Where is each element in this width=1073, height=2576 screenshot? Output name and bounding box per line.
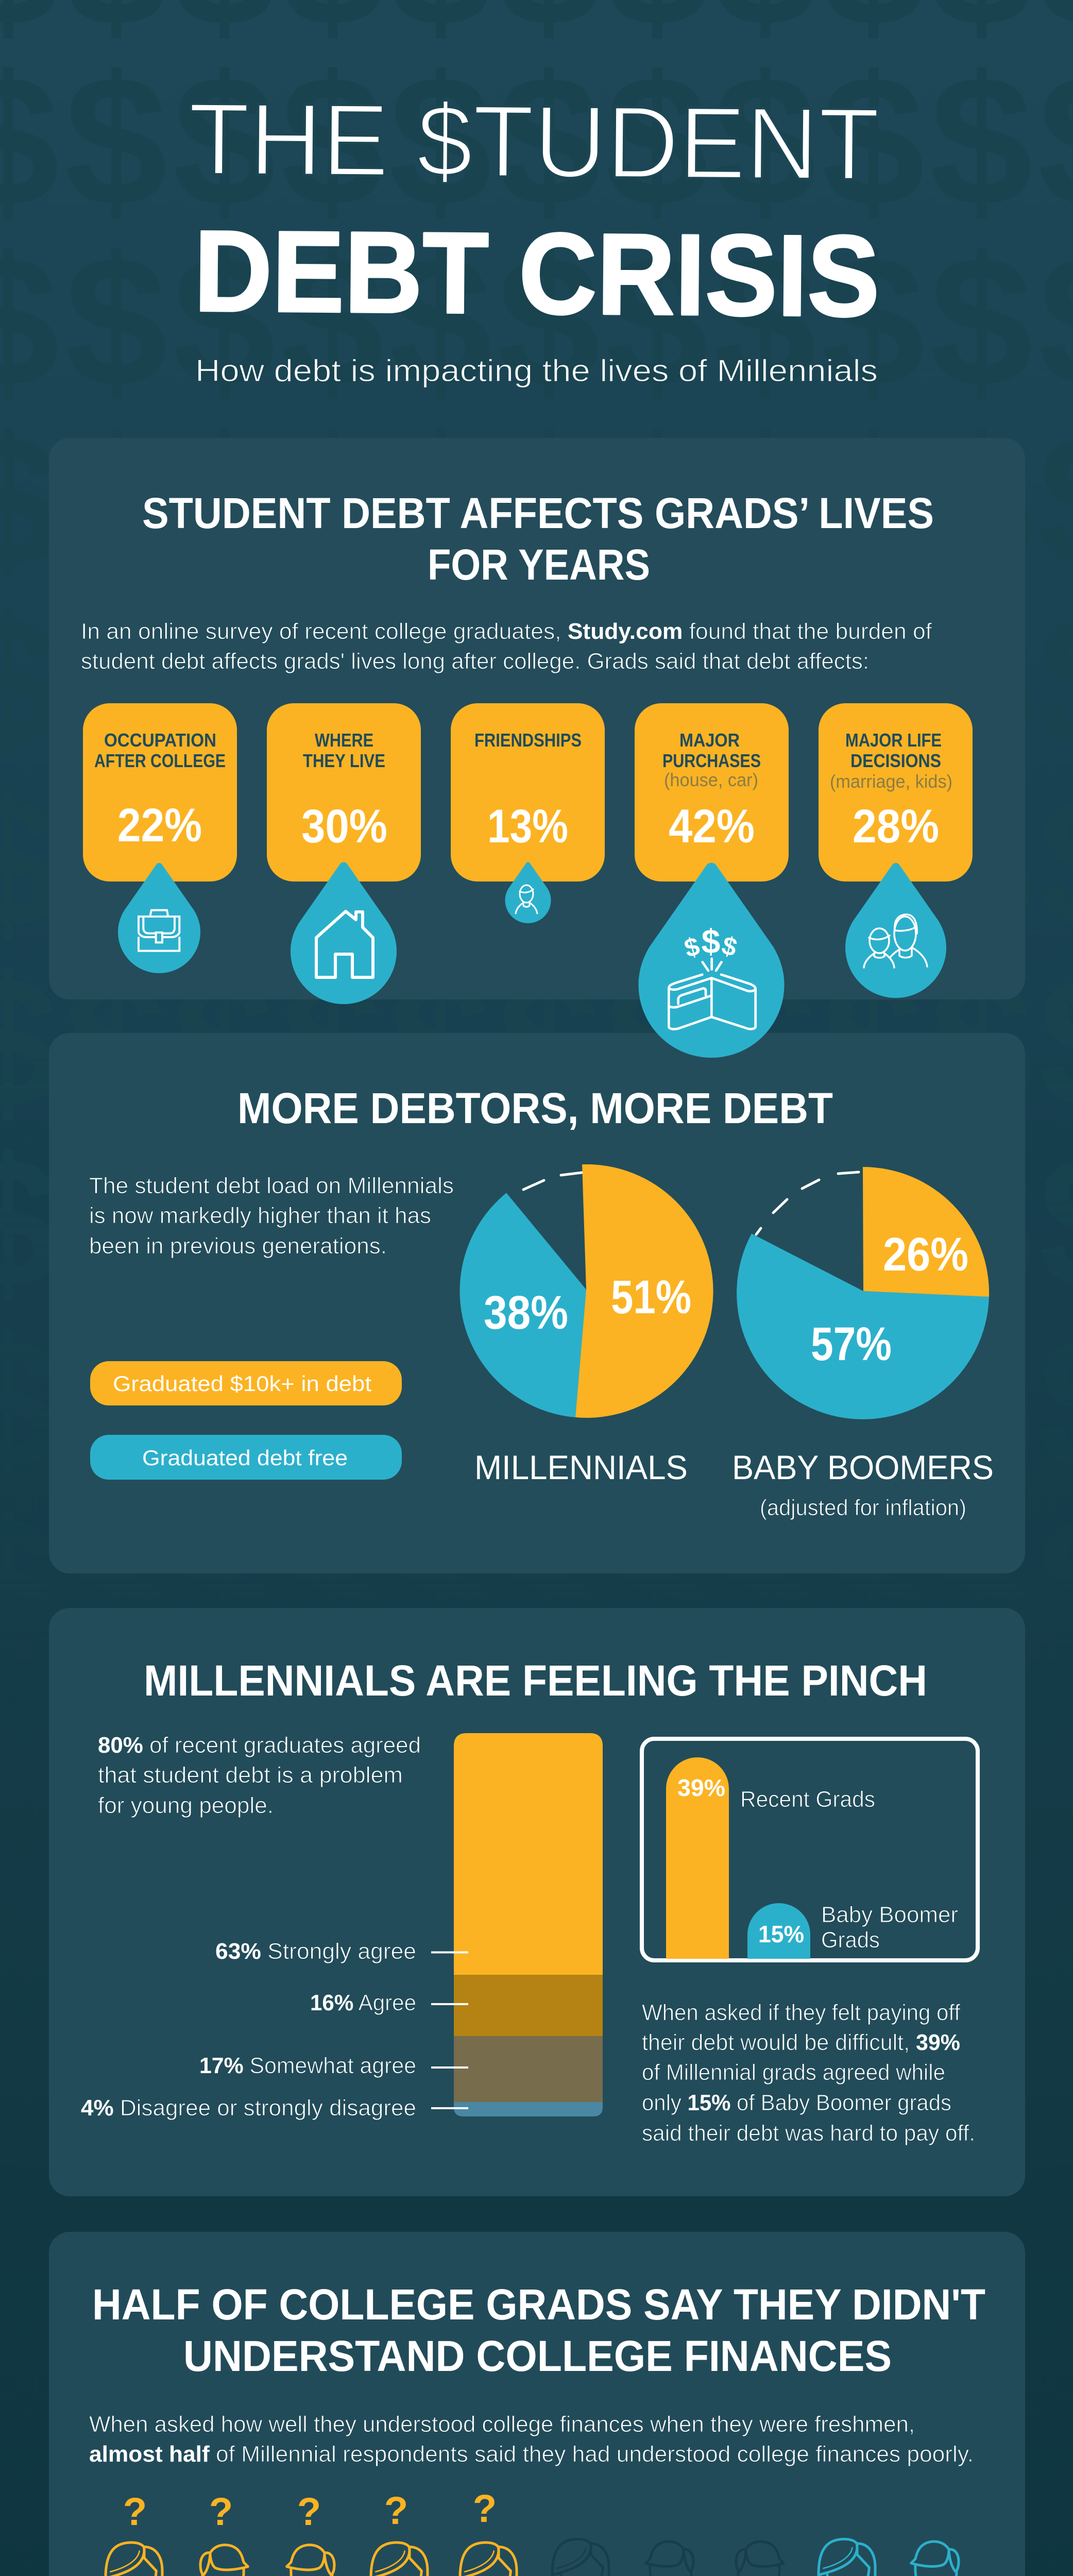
bar label: somewhat agree: 17% Somewhat agree	[199, 2053, 416, 2078]
intro text	[89, 1173, 454, 1259]
card: major purchases: PURCHASES	[662, 750, 761, 771]
card: where they live	[267, 703, 421, 882]
heading: MILLENNIALS ARE FEELING THE PINCH	[144, 1656, 927, 1705]
intro text: The student debt load on Millennials	[89, 1173, 454, 1198]
drop: family icon	[845, 863, 946, 998]
stacked bar chart	[454, 1733, 603, 2116]
bar label: agree: 16% Agree	[310, 1990, 416, 2015]
card: friendships	[451, 703, 605, 882]
label: baby boomers: BABY BOOMERS	[732, 1448, 994, 1486]
card: major purchases: MAJOR	[679, 730, 740, 751]
bar: baby boomer grads	[747, 1902, 958, 1959]
bar label: disagree: 4% Disagree or strongly disagree	[81, 2095, 416, 2121]
card: where they live: THEY LIVE	[303, 750, 385, 771]
legend: graduated with debt: Graduated $10k+ in debt	[113, 1371, 371, 1396]
person: confused woman 1	[98, 2543, 172, 2576]
card: occupation: OCCUPATION	[104, 730, 216, 751]
intro text: In an online survey of recent college graduates, Study.com found that the burden of	[81, 619, 932, 644]
right text: only 15% of Baby Boomer grads	[642, 2090, 951, 2115]
person: neutral woman	[544, 2539, 618, 2576]
pie chart: millennials: 38%	[484, 1286, 568, 1339]
question marks: ?	[123, 2490, 147, 2534]
pie chart: millennials: 51%	[611, 1271, 691, 1324]
drop: wallet icon	[639, 862, 784, 1058]
card: occupation: 22%	[117, 799, 202, 852]
person: happy woman	[811, 2539, 884, 2576]
right text	[642, 2000, 975, 2146]
drop: wallet icon: $	[719, 930, 740, 962]
drop: friendship person icon	[505, 862, 551, 923]
intro text: When asked how well they understood college finances when they were freshmen,	[89, 2412, 915, 2437]
drop: wallet icon: $	[702, 922, 720, 960]
card: major life decisions: 28%	[853, 800, 939, 853]
card: where they live: WHERE	[315, 730, 373, 751]
panel: millennials are feeling the pinch	[49, 1608, 1025, 2196]
drop: briefcase icon	[118, 863, 200, 973]
right text: their debt would be difficult, 39%	[642, 2030, 960, 2055]
person: confused man 2	[277, 2545, 347, 2576]
card: occupation	[83, 703, 237, 882]
intro text	[89, 2412, 974, 2467]
bar: baby boomer grads: 15%	[758, 1921, 804, 1947]
card: friendships: 13%	[487, 800, 568, 853]
person: neutral man 2	[724, 2541, 794, 2576]
pie chart: baby boomers: 57%	[811, 1318, 892, 1370]
card: major purchases: (house, car)	[664, 769, 758, 790]
question marks: ?	[297, 2490, 321, 2534]
left text: for young people.	[98, 1793, 274, 1818]
legend: debt free	[90, 1435, 402, 1480]
heading: STUDENT DEBT AFFECTS GRADS’ LIVES	[142, 489, 934, 537]
card: occupation: AFTER COLLEGE	[94, 750, 226, 771]
heading: MORE DEBTORS, MORE DEBT	[237, 1084, 833, 1132]
heading	[142, 489, 934, 589]
comparison box	[642, 1739, 978, 1960]
legend: graduated with debt	[90, 1361, 402, 1405]
person: neutral man 1	[636, 2541, 706, 2576]
pie chart: baby boomers: 26%	[883, 1228, 968, 1281]
card: major life decisions	[819, 703, 973, 882]
question marks: ?	[209, 2490, 233, 2534]
drop: wallet icon: $	[682, 931, 703, 963]
bar label: agree	[310, 1990, 468, 2015]
label: millennials: MILLENNIALS	[474, 1448, 688, 1486]
card: major life decisions: DECISIONS	[850, 750, 941, 771]
card: friendships: FRIENDSHIPS	[474, 730, 582, 751]
card: major life decisions: (marriage, kids)	[830, 771, 952, 792]
person: confused man 1	[188, 2545, 258, 2576]
right text: said their debt was hard to pay off.	[642, 2121, 975, 2146]
heading: UNDERSTAND COLLEGE FINANCES	[183, 2332, 892, 2380]
intro text: been in previous generations.	[89, 1233, 387, 1259]
bar: baby boomer grads: Grads	[821, 1927, 880, 1953]
drop: house icon	[291, 862, 397, 1004]
left text	[98, 1733, 421, 1818]
question marks: ?	[473, 2487, 497, 2531]
left text: 80% of recent graduates agreed	[98, 1733, 421, 1758]
question marks	[123, 2487, 497, 2534]
bar: recent grads: Recent Grads	[740, 1787, 875, 1812]
title	[188, 82, 880, 388]
panel: more debtors, more debt	[49, 1033, 1025, 1573]
right text: of Millennial grads agreed while	[642, 2060, 945, 2085]
note: adjusted for inflation: (adjusted for inflation)	[760, 1495, 966, 1520]
card: where they live: 30%	[301, 800, 387, 853]
title line two: DEBT CRISIS	[194, 207, 880, 341]
heading: FOR YEARS	[428, 540, 650, 589]
pie chart: millennials	[460, 1164, 713, 1418]
intro text	[81, 619, 932, 674]
right text: When asked if they felt paying off	[642, 2000, 961, 2025]
card: major purchases	[635, 703, 789, 882]
intro text: almost half of Millennial respondents said they had understood college finances poorly.	[89, 2442, 974, 2467]
card: major purchases: 42%	[669, 800, 755, 853]
legend: debt free: Graduated debt free	[142, 1446, 348, 1470]
intro text: is now markedly higher than it has	[89, 1203, 431, 1228]
bar: recent grads: 39%	[677, 1774, 725, 1801]
background dollar sign pattern	[0, 0, 1073, 124]
heading: HALF OF COLLEGE GRADS SAY THEY DIDN'T	[92, 2280, 985, 2329]
bar label: strongly agree: 63% Strongly agree	[215, 1939, 416, 1964]
person: confused woman 2	[363, 2543, 437, 2576]
person: happy man	[901, 2541, 971, 2576]
heading	[92, 2280, 985, 2380]
person: confused woman 3	[452, 2543, 526, 2576]
panel: half of college grads	[49, 2232, 1025, 2576]
question marks: ?	[384, 2489, 408, 2533]
left text: that student debt is a problem	[98, 1762, 403, 1788]
title line one: THE $TUDENT	[188, 82, 880, 202]
pie chart: baby boomers	[737, 1167, 989, 1419]
bar: recent grads	[666, 1757, 875, 1959]
card: major life decisions: MAJOR LIFE	[845, 730, 942, 751]
panel: student debt affects grads' lives	[49, 438, 1025, 1058]
subtitle: How debt is impacting the lives of Millennials	[195, 353, 878, 388]
intro text: student debt affects grads' lives long after college. Grads said that debt affects:	[81, 649, 869, 674]
bar: baby boomer grads: Baby Boomer	[821, 1902, 958, 1927]
